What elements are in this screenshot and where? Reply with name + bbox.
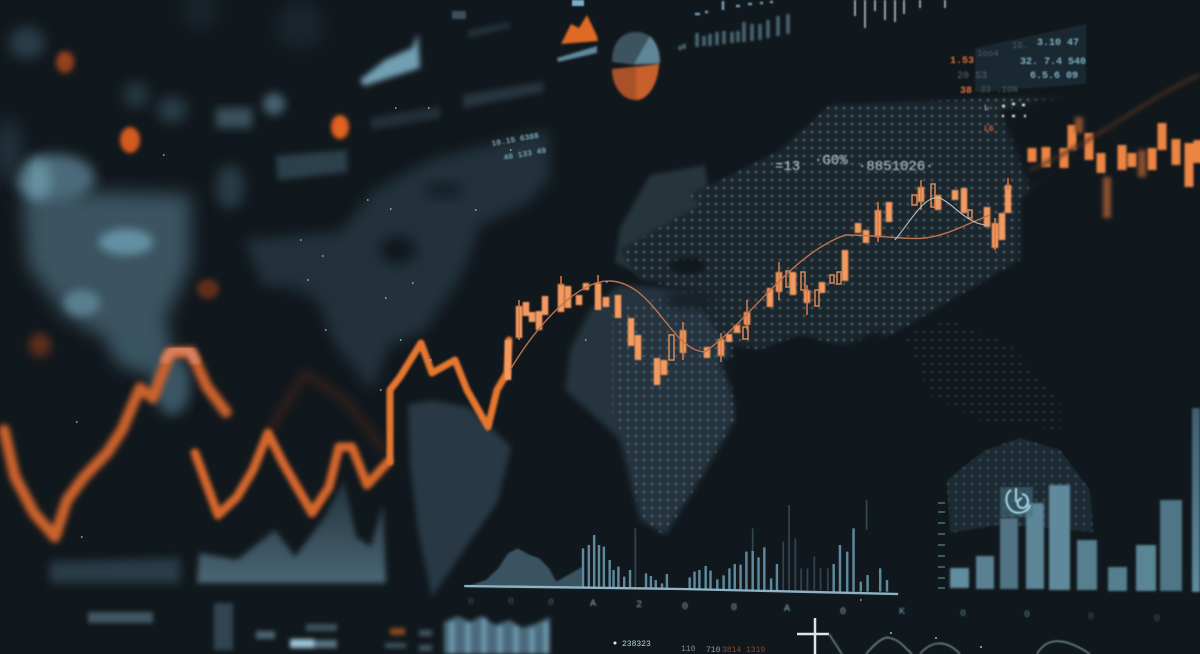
candles: solid bodies [508,185,1008,385]
bottom left blurred widgets [88,603,432,651]
world map: North America [245,130,550,390]
panel: top right data table: 32. 7.4 540 [1020,57,1086,68]
map labels [775,153,934,175]
map labels: =13 [775,159,800,175]
icon: orange crown triangle [561,15,598,44]
axis labels [468,597,1160,625]
panel: top right data table [950,24,1086,134]
axis labels: 0 [1024,610,1030,621]
panel: top right data table: 1G. [1012,41,1028,51]
bar chart: y axis ticks [938,503,945,588]
axis labels: 0 [682,602,688,613]
candles: wicks [519,178,1008,362]
bar chart: bottom left blurred [444,616,550,654]
small blue marker above triangle [572,0,584,6]
panel: top right data table: L· [984,104,994,113]
panel: top right data table: 1oo4 [977,49,999,59]
histogram: axis [464,586,898,594]
bottom status text [614,640,765,654]
axis labels: K [899,607,905,618]
candles: dim far bodies [1079,117,1142,218]
histogram: left hill [464,548,583,588]
axis labels: A [590,599,596,610]
world map: Australia dots [947,438,1093,533]
dark area at upper right [1000,60,1200,190]
world map: upper panel text [491,132,547,163]
world map: upper panel text: 10.15 6388 [491,132,540,149]
map labels: ·8851026· [858,159,934,175]
bar chart: blurred hills lower left [50,480,386,583]
panel: top right data table: 38 [960,86,972,97]
world map: Southeast Asia dots [905,320,1060,430]
moving average line [510,75,1200,370]
world map: Asia dotted [620,95,1130,470]
bar chart: lower center histogram [464,500,898,594]
axis labels: 0 [548,598,554,609]
panel: blurred cloud haze at left [0,120,190,415]
bar chart: top small bars [680,14,788,50]
candlestick chart: orange candles [508,117,1198,385]
candles: right blurred bodies [1032,123,1198,187]
axis labels: 0 [960,609,966,620]
bar chart: top thin needle bars [855,0,945,28]
icon: globe glyph on bars [1000,487,1033,517]
scattered sparkle points [76,108,982,647]
axis labels: 2 [636,600,642,611]
axis labels: 0 [1088,612,1094,623]
axis labels: 0 [508,597,514,608]
axis labels: 0 [840,607,846,618]
world map: South America [408,400,511,597]
panel: top right data table: 33 .1GN [980,85,1018,95]
world map: Africa [565,285,735,535]
icon: pie chart [612,32,660,100]
axis labels: 0 [468,597,474,608]
icon: crosshair [797,618,829,654]
panel: top right data table: 1.53 [950,56,974,67]
bottom status text: 238323 [622,640,651,649]
axis labels: 0 [1154,614,1160,625]
panel: top right data table: 3.10 47 [1037,38,1079,49]
axis labels: 0 [731,603,737,614]
line chart: bottom curves [829,634,1090,654]
axis labels: A [784,604,790,615]
histogram: dim bars [635,500,867,591]
bottom status text: 110 [681,645,696,654]
panel: top right data table: LG [984,125,994,134]
panel: top right data table: 6.5.6 09 [1030,71,1078,82]
line chart: blurred orange left trend [4,340,509,537]
panel: blurred top dashboard widgets [9,0,543,357]
candles: hollow bodies [669,184,972,360]
histogram: bars [583,528,887,592]
panel: top right data table: 20 S3 [957,71,987,82]
top small light markers [695,1,773,14]
map labels: ·G0% [814,153,848,169]
world map: Europe [615,165,710,275]
small label under triangle [557,46,597,62]
bar chart: lower right bars [950,408,1200,592]
world map: upper panel text: 40 133 49 [503,147,547,163]
